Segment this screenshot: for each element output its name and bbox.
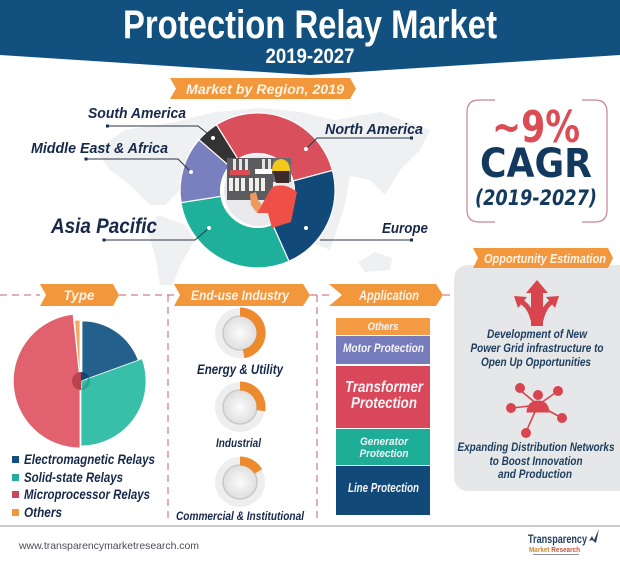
label: commercial & institutional: Commercial & Institutional: [176, 511, 305, 523]
label: Asia Pacific: Asia Pacific: [50, 215, 157, 238]
logo: transparency market research: Market Research: [529, 545, 580, 554]
bar segment: motor protection: [336, 336, 430, 364]
world map background: [95, 108, 430, 285]
logo: transparency market research: Transparency: [528, 534, 587, 546]
gauge: industrial: [215, 382, 265, 432]
donut chart: market by region: [180, 113, 335, 268]
segment: North America: [216, 113, 332, 181]
text: expanding distribution networks: [458, 440, 615, 481]
connector lines and dots: [84, 124, 413, 242]
text: expanding distribution networks: and Production: [498, 467, 572, 481]
bar segment: others: [336, 318, 430, 335]
legend item: solid-state relays: Solid-state Relays: [24, 469, 123, 485]
text: expanding distribution networks: to Boost Innovation: [490, 454, 582, 468]
text: development of new power grid: Development of New: [487, 327, 588, 341]
bar segment: transformer protection: Protection: [351, 395, 417, 412]
CAGR callout: CAGR: [480, 141, 592, 187]
label: energy & utility: Energy & Utility: [197, 361, 284, 377]
legend item: others: [12, 504, 62, 520]
legend: type: [12, 451, 155, 520]
segment: Middle East & Africa: [180, 140, 230, 203]
slice: microprocessor relays: [13, 314, 80, 448]
ribbon: opportunity estimation: [473, 248, 613, 268]
label: South America: South America: [88, 105, 186, 122]
text: development of new power grid: Open Up Opportunities: [481, 355, 591, 369]
logo: transparency market research: [528, 529, 599, 555]
ribbon: application: Application: [358, 287, 419, 303]
ribbon: type: [40, 284, 119, 306]
CAGR callout: (2019-2027): [475, 186, 597, 210]
bar segment: motor protection: Motor Protection: [343, 343, 424, 355]
slice: electromagnetic relays: [82, 321, 138, 381]
segment: Europe: [272, 170, 335, 261]
label: industrial: Industrial: [216, 438, 262, 450]
ribbon: type: Type: [64, 287, 95, 303]
bar segment: line protection: [336, 466, 430, 515]
icon: diverging arrows: [514, 280, 559, 326]
panel: opportunity estimation: [454, 248, 620, 491]
slice: solid-state relays: [81, 359, 146, 446]
text: development of new power grid: [470, 327, 604, 369]
CAGR callout: [467, 100, 607, 222]
gauge: energy & utility: [215, 308, 265, 358]
ribbon: application: [329, 284, 443, 306]
segment: Asia Pacific: [181, 196, 289, 268]
label: North America: North America: [325, 121, 423, 138]
ribbon: market by region: [170, 78, 356, 99]
legend item: others: Others: [24, 504, 62, 520]
ribbon: market by region: Market by Region, 2019: [186, 81, 344, 97]
website url: www.transparencymarketresearch.com: [18, 540, 199, 552]
segment: South America: [199, 125, 238, 166]
ribbon: end-use industry: [174, 284, 310, 306]
bar segment: generator protection: Generator: [360, 436, 409, 448]
title: Protection Relay Market: [123, 3, 497, 47]
center illustration: worker at relay panel: [224, 156, 297, 228]
legend item: electromagnetic relays: Electromagnetic Relays: [24, 451, 155, 467]
header banner: [0, 0, 620, 75]
bar segment: generator protection: Protection: [360, 448, 409, 460]
pie hub: [72, 372, 90, 390]
CAGR callout: ~9%: [492, 102, 580, 153]
subtitle: 2019-2027: [266, 45, 354, 68]
label: Middle East & Africa: Middle East & Africa: [31, 140, 168, 157]
bar segment: generator protection: [336, 429, 430, 465]
bar segment: transformer protection: [336, 366, 430, 428]
pie chart: type: [13, 314, 146, 448]
bar segment: others: Others: [368, 321, 398, 333]
footer rule: [0, 525, 620, 527]
stacked bar: application: [336, 318, 430, 515]
bar segment: transformer protection: Transformer: [345, 379, 424, 396]
gauge: commercial & institutional: [215, 457, 265, 507]
slice: others: [75, 320, 80, 381]
bar segment: line protection: Line Protection: [348, 481, 419, 495]
ribbon: end-use industry: End-use Industry: [191, 288, 290, 303]
icon: distribution network: [506, 384, 566, 438]
section dividers: [0, 295, 453, 522]
label: Europe: Europe: [382, 220, 428, 237]
legend item: microprocessor relays: Microprocessor Relays: [24, 486, 150, 502]
